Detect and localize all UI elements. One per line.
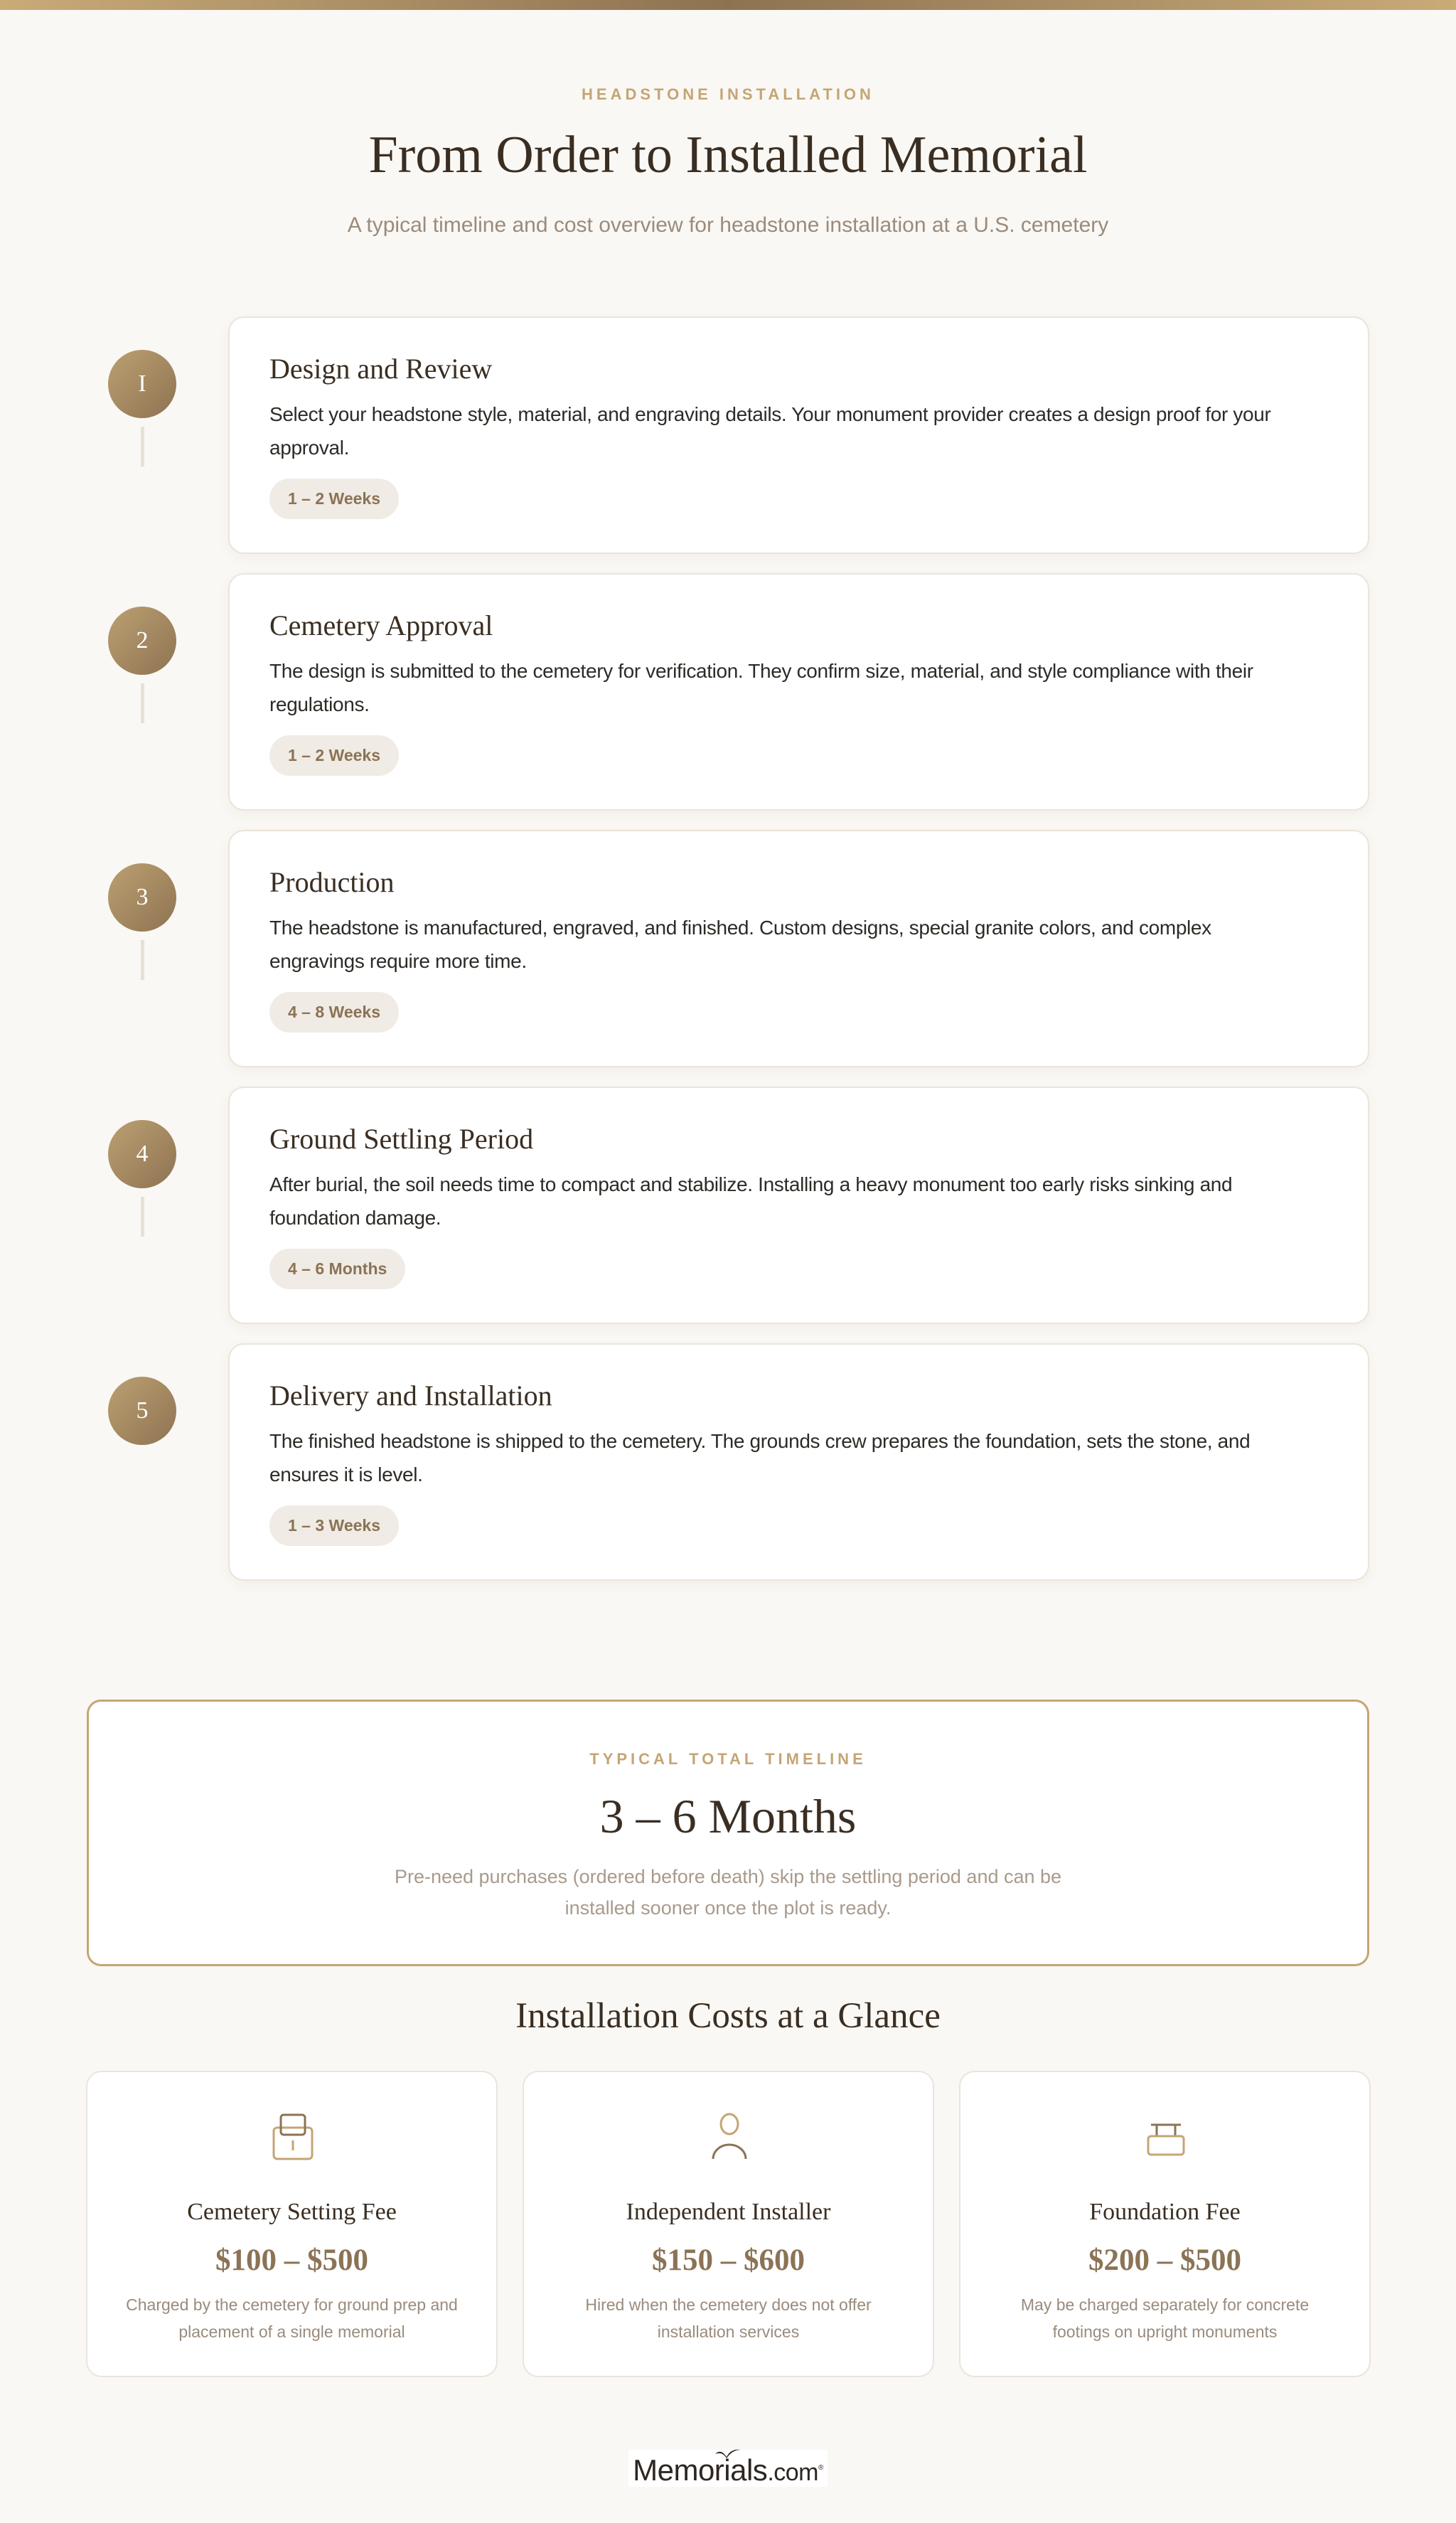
cost card: foundation fee: Foundation Fee (1089, 2199, 1241, 2225)
cost card: cemetery setting fee (86, 2071, 498, 2377)
step 1 card (228, 316, 1369, 554)
cost card: independent installer: $150 – $600 (652, 2244, 805, 2277)
step 2 marker (108, 607, 176, 675)
cost card: cemetery setting fee: Cemetery Setting Fee (187, 2199, 397, 2225)
step 2 card: Cemetery Approval (269, 609, 493, 641)
costs heading: Installation Costs at a Glance (515, 1996, 941, 2036)
step 4 marker (108, 1120, 176, 1188)
step 5 card (228, 1343, 1369, 1581)
step 1 marker: I (138, 370, 146, 397)
step 5 card: 1 – 3 Weeks (288, 1516, 380, 1535)
logo text: Memorials.com® (633, 2453, 823, 2487)
title: From Order to Installed Memorial (368, 126, 1088, 184)
step 1 card: Design and Review (269, 353, 492, 385)
step 2 card: 1 – 2 Weeks (288, 746, 380, 764)
step 4 card: 4 – 6 Months (288, 1259, 387, 1278)
step 3 marker: 3 (136, 884, 148, 910)
step 3 card: 4 – 8 Weeks (288, 1003, 380, 1021)
step 3 card (228, 830, 1369, 1067)
cost card: independent installer: installation services (658, 2322, 799, 2341)
step 3 marker (108, 863, 176, 932)
step 4 marker: 4 (136, 1141, 148, 1167)
icon: headstone (273, 2113, 313, 2160)
step 1 card: Select your headstone style, material, and engraving details. Your monument provider creates a design proof for your (269, 403, 1270, 425)
cost card: independent installer (523, 2071, 934, 2377)
step 5 card: Delivery and Installation (269, 1380, 552, 1412)
icon: foundation (1147, 2123, 1184, 2156)
cost card: foundation fee: footings on upright monuments (1053, 2322, 1277, 2341)
cost card: foundation fee: $200 – $500 (1088, 2244, 1241, 2277)
step 4 card (228, 1087, 1369, 1324)
step 5 card: The finished headstone is shipped to the cemetery. The grounds crew prepares the foundation, sets the stone, and (269, 1430, 1250, 1452)
callout note: installed sooner once the plot is ready. (565, 1897, 891, 1919)
cost card: cemetery setting fee: placement of a single memorial (178, 2322, 405, 2341)
step 1 marker (108, 350, 176, 418)
total timeline callout (87, 1700, 1369, 1966)
top bar (0, 0, 1456, 10)
cost card: independent installer: Hired when the cemetery does not offer (585, 2295, 872, 2314)
step 4 card: Ground Settling Period (269, 1123, 533, 1155)
step 3 card: engravings require more time. (269, 950, 527, 972)
step 4 card: After burial, the soil needs time to compact and stabilize. Installing a heavy monument too early risks sinking and (269, 1173, 1232, 1195)
step 3 card: The headstone is manufactured, engraved, and finished. Custom designs, special granite colors, and complex (269, 917, 1211, 939)
subtitle: A typical timeline and cost overview for headstone installation at a U.S. cemetery (348, 213, 1108, 237)
step 5 marker: 5 (136, 1397, 148, 1424)
cost card: foundation fee: May be charged separately for concrete (1021, 2295, 1309, 2314)
step 1 card: 1 – 2 Weeks (288, 489, 380, 508)
step 2 card: The design is submitted to the cemetery for verification. They confirm size, material, and style compliance with their (269, 660, 1253, 682)
cost card: foundation fee (959, 2071, 1371, 2377)
step 5 marker (108, 1377, 176, 1445)
callout value: 3 – 6 Months (600, 1789, 856, 1843)
logo bird (715, 2449, 741, 2458)
step 2 card (228, 573, 1369, 811)
cost card: independent installer: Independent Installer (626, 2199, 830, 2225)
logo (628, 2450, 828, 2487)
cost card: cemetery setting fee: Charged by the cemetery for ground prep and (126, 2295, 458, 2314)
step 3 card: Production (269, 866, 395, 898)
callout note (395, 1866, 1061, 1919)
step 4 card: foundation damage. (269, 1207, 441, 1229)
cost card: cemetery setting fee: $100 – $500 (215, 2244, 368, 2277)
step 5 card: ensures it is level. (269, 1463, 423, 1485)
eyebrow label: HEADSTONE INSTALLATION (582, 85, 874, 103)
icon: person (712, 2113, 746, 2159)
step 1 card: approval. (269, 437, 349, 459)
step 2 marker: 2 (136, 627, 148, 654)
callout note: Pre-need purchases (ordered before death) skip the settling period and can be (395, 1866, 1061, 1887)
step 2 card: regulations. (269, 693, 370, 715)
callout label: TYPICAL TOTAL TIMELINE (589, 1750, 867, 1768)
